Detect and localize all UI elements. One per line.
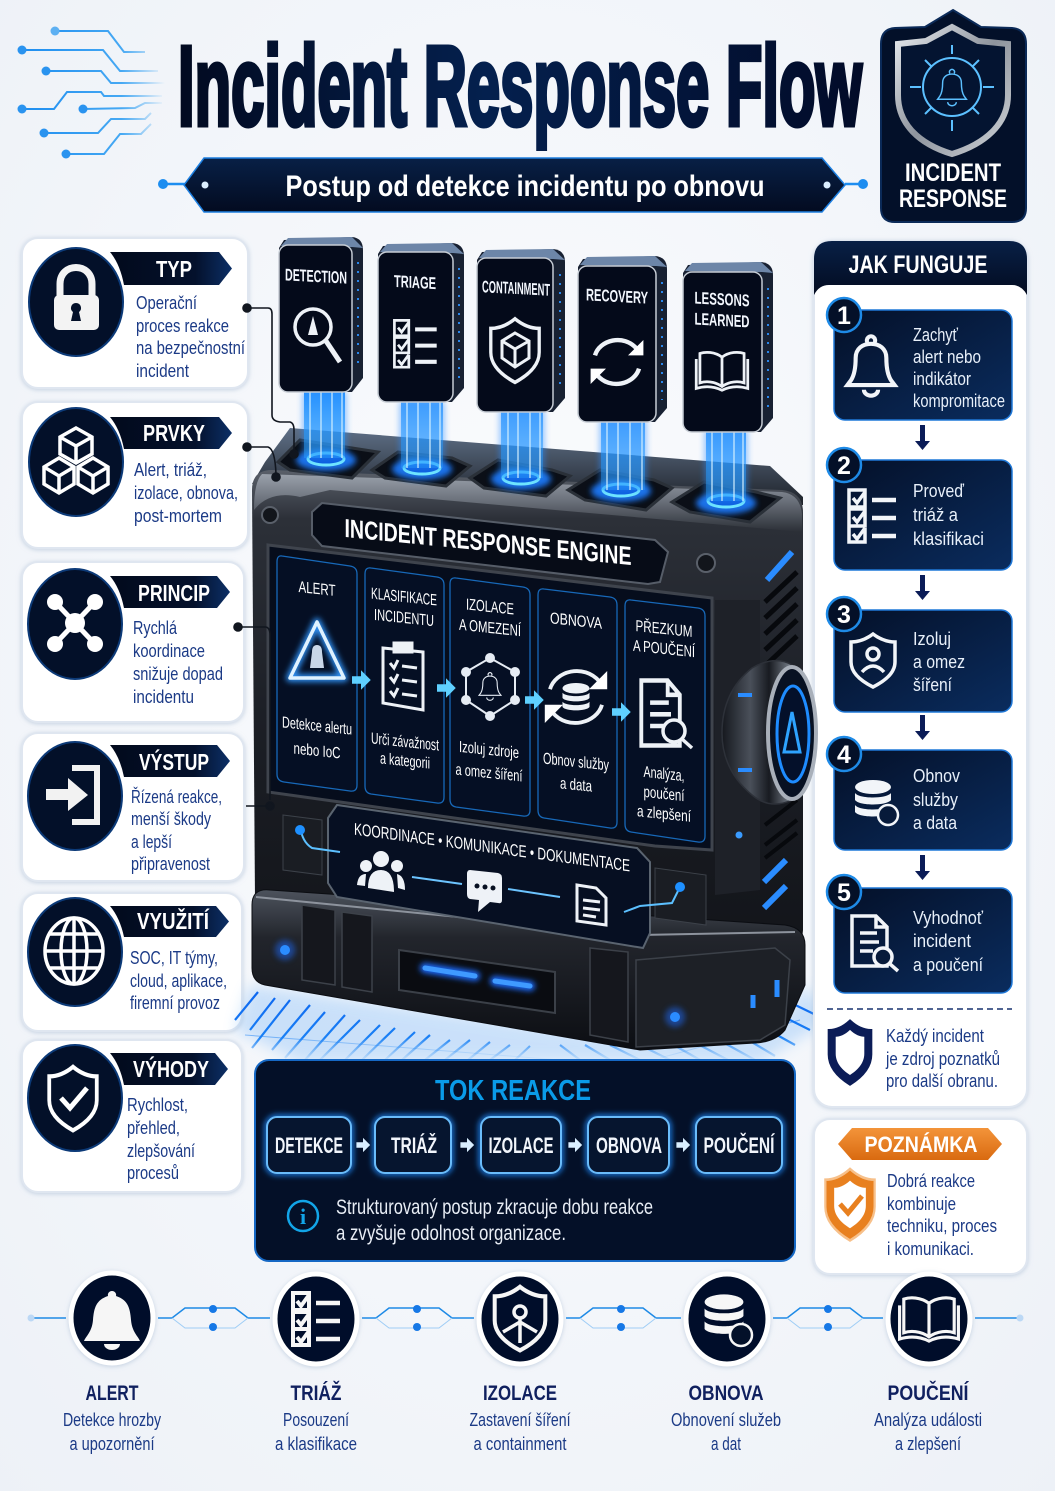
light beams [302, 392, 748, 501]
status card: triage: TRIAGE [394, 272, 436, 293]
text: VYUŽITÍ: SOC, IT týmy, [130, 948, 218, 968]
tab: VÝSTUP [110, 745, 230, 777]
heading: JAK FUNGUJE [848, 251, 988, 279]
icon: chat [467, 870, 502, 912]
stage: izolace: Izoluj zdroje [459, 738, 519, 762]
text: TYP [136, 293, 245, 381]
coordination banner [295, 805, 685, 948]
note text [887, 1171, 997, 1259]
flow labels [275, 1133, 775, 1158]
flow description: Strukturovaný postup zkracuje dobu reakce [336, 1196, 653, 1219]
text: PRINCIP: incidentu [133, 687, 194, 707]
tab: PRINCIP: PRINCIP [138, 580, 210, 606]
note text: Dobrá reakce [887, 1171, 975, 1191]
note text: i komunikaci. [887, 1239, 974, 1259]
flow description [336, 1196, 653, 1245]
text: VÝHODY: procesů [127, 1163, 179, 1183]
text: PRINCIP: snižuje dopad [133, 664, 223, 684]
stage: alert: nebo IoC [293, 740, 341, 762]
flow boxes [267, 1117, 782, 1173]
step 5: Vyhodnoť [913, 908, 983, 928]
status card: detection: DETECTION [285, 265, 347, 288]
status card: containment [477, 249, 565, 412]
text: TYP: Operační [136, 293, 197, 313]
step 5: a poučení [913, 955, 983, 975]
flow arrows [356, 1138, 690, 1152]
stage: izolace: A OMEZENÍ [459, 615, 521, 640]
step 4: služby [913, 790, 958, 810]
icon: info: i [300, 1204, 306, 1229]
closing note [885, 1026, 1000, 1091]
step 1: alert nebo [913, 347, 981, 367]
step: alert: Detekce hrozby [63, 1410, 161, 1430]
text: VÝSTUP [131, 787, 222, 874]
icon: checklist [394, 320, 437, 367]
tab [838, 1128, 1002, 1160]
panel: TOK REAKCE: TOK REAKCE [435, 1075, 591, 1107]
engine top face [252, 428, 803, 505]
icon: globe [28, 898, 122, 1006]
step 2 [827, 448, 1012, 570]
engine device [252, 392, 805, 1050]
step: alert [63, 1273, 161, 1454]
base highlight edge [256, 897, 795, 935]
panel: TOK REAKCE [255, 1060, 795, 1261]
tab: VÝHODY: VÝHODY [133, 1055, 209, 1082]
panel: POZNAMKA [814, 1119, 1027, 1274]
text: TYP: incident [136, 361, 189, 381]
icon: magnifier [295, 309, 340, 362]
stage: izolace: a omez šíření [456, 761, 523, 786]
side dial [722, 661, 816, 804]
text: VYUŽITÍ [130, 948, 227, 1013]
text: VÝSTUP: menší škody [131, 809, 211, 829]
base segments [302, 905, 790, 1047]
stage: klasifikace: KLASIFIKACE [371, 585, 437, 609]
step 5: incident [913, 931, 971, 951]
closing note: je zdroj poznatků [885, 1049, 1000, 1069]
flow labels: OBNOVA [596, 1133, 662, 1158]
icon: refresh [591, 340, 643, 384]
step: izolace: a containment [474, 1434, 566, 1454]
step 2: triáž a [913, 505, 959, 525]
flow labels: DETEKCE [275, 1133, 343, 1158]
tab: POZNÁMKA [864, 1132, 978, 1157]
text: PRVKY: Alert, triáž, [134, 460, 207, 480]
flow labels: IZOLACE [488, 1133, 554, 1158]
stage arrows [352, 670, 631, 722]
glowing rings [308, 453, 744, 507]
step: triaz: TRIÁŽ [290, 1381, 342, 1405]
stage: prezkum: poučení [644, 783, 685, 805]
stage: izolace: IZOLACE [466, 596, 514, 619]
step: triaz [275, 1274, 357, 1454]
step: obnova [671, 1274, 781, 1454]
step 4 [827, 737, 1012, 850]
stage: prezkum: Analýza, [644, 763, 684, 785]
text: TYP: proces reakce [136, 316, 229, 336]
step 2: Proveď [913, 481, 965, 501]
step: pouceni: POUČENÍ [888, 1381, 969, 1405]
subtitle banner: Postup od detekce incidentu po obnovu [286, 170, 764, 203]
closing note: pro další obranu. [886, 1071, 998, 1091]
arrow [915, 715, 930, 740]
step: pouceni: Analýza události [874, 1410, 982, 1430]
tab: VÝSTUP: VÝSTUP [139, 748, 209, 775]
step 3: a omez [913, 652, 965, 672]
text: VÝHODY: zlepšování [127, 1141, 195, 1161]
coordination banner: KOORDINACE • KOMUNIKACE • DOKUMENTACE [354, 820, 630, 875]
step: obnova: OBNOVA [688, 1382, 764, 1405]
step 4: 4 [837, 741, 851, 769]
stage: prezkum [625, 600, 705, 842]
stage: prezkum: PŘEZKUM [636, 616, 692, 641]
step 3 [827, 597, 1012, 712]
status card: triage [378, 243, 464, 402]
top silver band [254, 474, 802, 532]
leader lines [234, 304, 298, 810]
step: pouceni [874, 1274, 982, 1454]
status card: lessons learned: LEARNED [694, 310, 750, 331]
icon: orange shield [825, 1169, 875, 1240]
tab: PRVKY [110, 417, 232, 449]
engine body [252, 470, 803, 960]
stage: alert: Detekce alertu [282, 713, 352, 739]
step 3: šíření [913, 675, 952, 695]
panel: TYP [22, 238, 248, 388]
step: obnova: Obnovení služeb [671, 1410, 781, 1430]
base light bars [275, 940, 777, 1027]
tab: VÝHODY [110, 1053, 228, 1085]
status card: lessons learned: LESSONS [694, 289, 750, 310]
text: VYUŽITÍ: cloud, aplikace, [130, 971, 227, 991]
icon: shield check [28, 1045, 122, 1151]
icon: info [288, 1201, 318, 1231]
tab: PRVKY: PRVKY [143, 420, 205, 446]
stage: klasifikace: a kategorii [380, 749, 430, 773]
flow labels: POUČENÍ [704, 1133, 775, 1158]
badge: incident response [881, 10, 1026, 222]
panel: VÝSTUP [22, 733, 244, 881]
text: PRVKY: post-mortem [134, 506, 222, 526]
step 2: klasifikaci [913, 529, 984, 549]
status card: containment: CONTAINMENT [482, 277, 550, 300]
step 1: indikátor [913, 369, 971, 389]
icon: network nodes [28, 569, 122, 679]
arrow [915, 425, 930, 450]
text: PRINCIP: koordinace [133, 641, 205, 661]
text: VYUŽITÍ: firemní provoz [130, 993, 220, 1013]
step 5 [827, 875, 1012, 993]
panel: VÝHODY [22, 1040, 242, 1192]
step 5: 5 [837, 879, 851, 907]
step: triaz: a klasifikace [275, 1434, 357, 1454]
stage: obnova: a data [560, 774, 592, 796]
tab: PRINCIP [110, 576, 230, 608]
text: VÝHODY [127, 1095, 195, 1183]
icon: shield cube [491, 319, 539, 382]
stage: obnova [538, 589, 617, 828]
title plate: INCIDENT RESPONSE ENGINE [344, 513, 632, 571]
heading [814, 241, 1027, 295]
step 1: kompromitace [913, 391, 1005, 411]
panel: JAK FUNGUJE [814, 241, 1027, 1107]
icon: sign-in arrow [28, 742, 122, 850]
step: triaz: Posouzení [283, 1410, 349, 1430]
tab: TYP [110, 252, 232, 285]
note text: kombinuje [887, 1194, 956, 1214]
step 3: 3 [837, 601, 851, 629]
text: PRINCIP [133, 618, 223, 707]
step 3: Izoluj [913, 629, 951, 649]
icon: people [357, 851, 405, 892]
arrow [915, 575, 930, 600]
text: VÝHODY: přehled, [127, 1118, 180, 1138]
stage: alert [277, 556, 357, 791]
status card: lessons learned [683, 262, 773, 432]
step 1 [827, 298, 1012, 420]
text: TYP: na bezpečnostní [136, 338, 245, 358]
status card: detection [279, 237, 363, 392]
stage: izolace [450, 578, 530, 816]
text: PRVKY: izolace, obnova, [134, 483, 238, 503]
stage: klasifikace: Urči závažnost [371, 729, 439, 755]
stage: klasifikace: INCIDENTU [374, 606, 434, 630]
note text: techniku, proces [887, 1216, 997, 1236]
circuit lines decoration [18, 26, 165, 158]
flow box glow [267, 1117, 782, 1173]
stage: klasifikace [365, 568, 444, 803]
step 4: a data [913, 813, 958, 833]
engine base [252, 890, 805, 1050]
stage: obnova: Obnov služby [543, 750, 609, 774]
badge: incident response: RESPONSE [899, 185, 1007, 213]
icon: lock [29, 248, 123, 356]
step: izolace [470, 1274, 570, 1454]
text: VÝSTUP: Řízená reakce, [131, 787, 222, 807]
subtitle banner [158, 158, 868, 212]
bottom connectors [28, 1305, 1024, 1331]
stage: prezkum: a zlepšení [637, 802, 691, 826]
step: pouceni: a zlepšení [895, 1434, 961, 1454]
step: obnova: a dat [711, 1434, 741, 1454]
text: VÝSTUP: a lepší [131, 832, 172, 852]
screen background [268, 545, 712, 850]
status card: recovery: RECOVERY [586, 285, 648, 308]
text: PRVKY [134, 460, 238, 526]
flow labels: TRIÁŽ [391, 1133, 437, 1158]
panel: PRINCIP [22, 562, 244, 722]
step: alert: a upozornění [70, 1434, 154, 1454]
stage: prezkum: A POUČENÍ [633, 636, 695, 661]
text: VÝHODY: Rychlost, [127, 1095, 188, 1115]
step: izolace: IZOLACE [483, 1382, 557, 1405]
panel: VYUŽITÍ [22, 893, 242, 1031]
step: alert: ALERT [86, 1382, 139, 1405]
closing note: Každý incident [886, 1026, 984, 1046]
step 1: Zachyť [913, 325, 958, 345]
tab: VYUŽITÍ [110, 906, 229, 937]
icon: shield [829, 1021, 871, 1084]
tab: TYP: TYP [156, 256, 192, 282]
stage: obnova: OBNOVA [550, 609, 602, 633]
icon: cubes [29, 408, 123, 516]
floor grid [235, 992, 818, 1060]
text: PRINCIP: Rychlá [133, 618, 178, 638]
status card: recovery [578, 256, 667, 422]
text: VÝSTUP: připravenost [131, 854, 210, 874]
floor glow [235, 985, 830, 1062]
side vents [262, 507, 797, 908]
top sockets [278, 440, 780, 522]
step 1: 1 [837, 302, 851, 330]
blue socket glow [296, 449, 756, 514]
stage: alert: ALERT [298, 578, 336, 600]
step 4: Obnov [913, 766, 960, 786]
step 2: 2 [837, 452, 851, 480]
badge: incident response: INCIDENT [905, 159, 1001, 187]
arrow [915, 855, 930, 880]
step: izolace: Zastavení šíření [470, 1410, 570, 1430]
icon: book [696, 352, 748, 390]
coordination sockets [283, 815, 706, 925]
tab: VYUŽITÍ: VYUŽITÍ [137, 907, 209, 934]
flow description: a zvyšuje odolnost organizace. [336, 1222, 566, 1245]
panel: PRVKY [22, 402, 248, 548]
title plate [312, 503, 668, 584]
icon: document [577, 885, 606, 925]
